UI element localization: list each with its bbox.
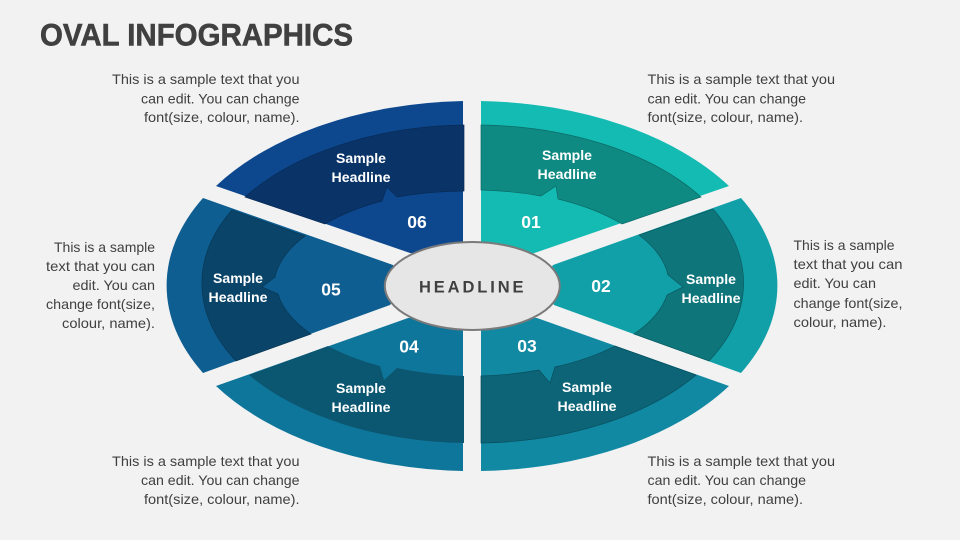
text block: segment 05 (46, 239, 155, 331)
text block: segment 02: change font(size, (794, 295, 902, 311)
text block: segment 03: This is a sample text that you (648, 453, 835, 469)
text block: segment 02: edit. You can (794, 275, 876, 291)
text block: segment 05: change font(size, (46, 296, 155, 312)
text block: segment 05: text that you can (46, 258, 155, 274)
number 05: 05 (321, 280, 341, 300)
label 02: Headline (682, 290, 741, 306)
text block: segment 04 (112, 453, 300, 507)
text block: segment 04: can edit. You can change (141, 472, 300, 488)
label 05: Sample (213, 270, 263, 286)
text block: segment 03 (648, 453, 835, 507)
inner panel 05 (202, 210, 311, 361)
text block: segment 02: This is a sample (794, 237, 895, 253)
label 03: Sample (562, 379, 612, 395)
band 06 (216, 101, 463, 258)
text block: segment 03: can edit. You can change (648, 472, 806, 488)
inner panel 02 (634, 209, 744, 361)
label 02: Sample (686, 271, 736, 287)
number 01: 01 (521, 212, 541, 232)
panel: segment 05 (167, 198, 405, 373)
title: OVAL INFOGRAPHICS (40, 16, 353, 52)
panel: segment 03 (481, 315, 729, 471)
text block: segment 05: colour, name). (62, 315, 155, 331)
text block: segment 02 (794, 237, 902, 330)
band 04 (216, 315, 463, 471)
text block: segment 01: font(size, colour, name). (648, 109, 803, 125)
label 02 (682, 271, 741, 306)
number 02: 02 (591, 276, 611, 296)
panel: segment 06 (216, 101, 464, 258)
text block: segment 05: This is a sample (54, 239, 155, 255)
text block: segment 01: can edit. You can change (648, 90, 806, 106)
text block: segment 01: This is a sample text that you (648, 71, 835, 87)
panel: segment 02 (540, 198, 777, 373)
band 03 (481, 315, 729, 471)
panel: segment 04 (216, 315, 464, 471)
inner panel 04 (249, 346, 464, 443)
center headline oval (385, 242, 560, 330)
label 06 (332, 150, 391, 185)
band 01 (481, 101, 729, 258)
inner panel 06 (245, 125, 464, 224)
label 01: Headline (538, 166, 597, 182)
label 06: Sample (336, 150, 386, 166)
inner panel 01 (481, 125, 701, 224)
label 01: Sample (542, 147, 592, 163)
center headline oval: HEADLINE (419, 278, 524, 296)
inner panel 03 (481, 346, 696, 443)
label 03 (558, 379, 617, 414)
band 02 (540, 198, 777, 373)
text block: segment 01 (648, 71, 835, 125)
panel: segment 01 (481, 101, 729, 258)
text block: segment 04: font(size, colour, name). (144, 491, 300, 507)
label 06: Headline (332, 169, 391, 185)
text block: segment 02: colour, name). (794, 314, 886, 330)
number 06: 06 (407, 212, 427, 232)
text block: segment 02: text that you can (794, 256, 902, 272)
number 03: 03 (517, 336, 537, 356)
number 04: 04 (399, 336, 419, 356)
label 04: Headline (332, 399, 391, 415)
label 05: Headline (208, 289, 268, 305)
text block: segment 06: This is a sample text that you (112, 71, 300, 87)
label 04 (332, 380, 391, 415)
label 05 (208, 270, 268, 305)
band 05 (167, 198, 405, 373)
text block: segment 06: can edit. You can change (141, 90, 300, 106)
label 03: Headline (558, 398, 617, 414)
label 01 (538, 147, 597, 182)
label 04: Sample (336, 380, 386, 396)
text block: segment 06 (112, 71, 300, 125)
text block: segment 05: edit. You can (72, 277, 155, 293)
text block: segment 04: This is a sample text that you (112, 453, 300, 469)
text block: segment 03: font(size, colour, name). (648, 491, 803, 507)
text block: segment 06: font(size, colour, name). (144, 109, 300, 125)
